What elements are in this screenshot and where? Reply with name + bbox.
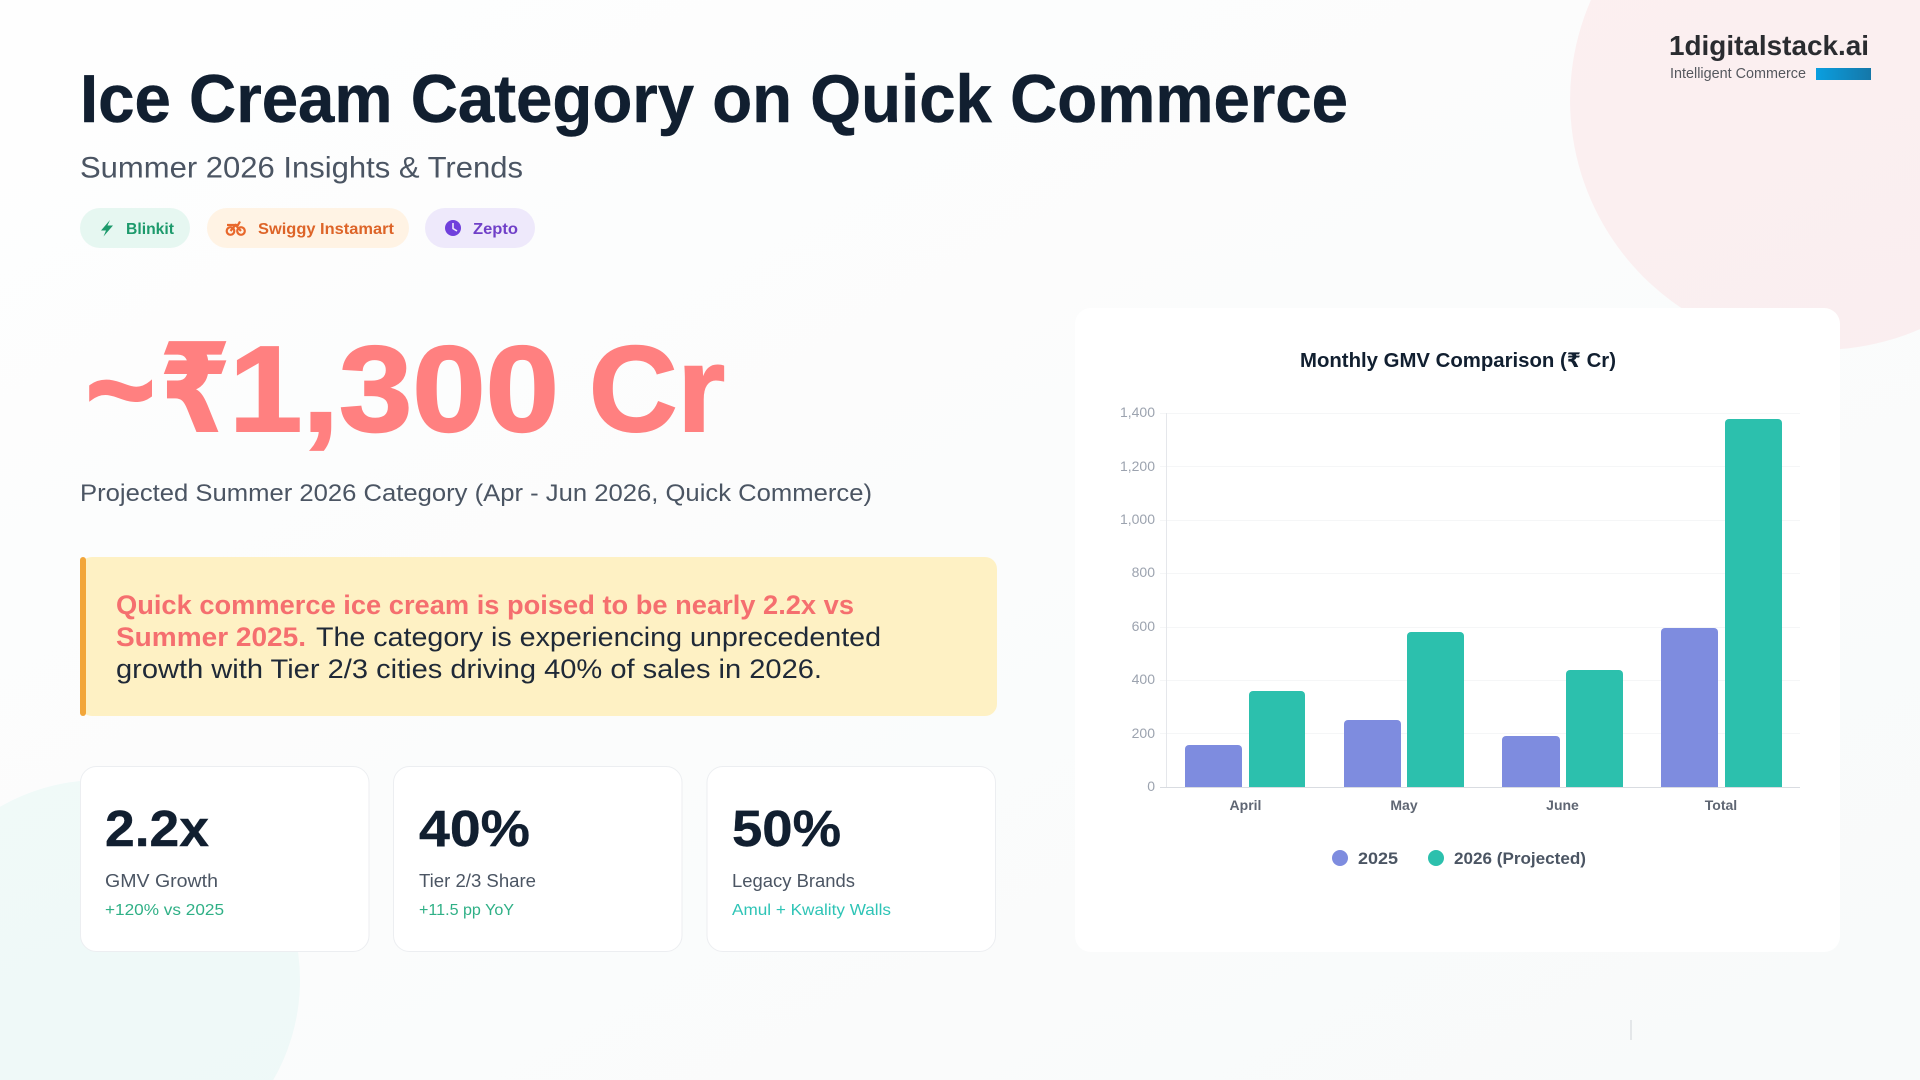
callout: The category is experiencing unprecedented (316, 622, 881, 652)
callout: growth with Tier 2/3 cities driving 40% of sales in 2026. (116, 654, 822, 684)
y axis labels (1120, 404, 1155, 794)
stat card: GMV growth (80, 766, 369, 952)
hero number: ₹ (160, 321, 230, 457)
x axis labels: April (1230, 797, 1261, 813)
x axis labels (1230, 797, 1737, 813)
bars: 2026 projected (1249, 419, 1782, 787)
callout: Summer 2025. (116, 622, 306, 652)
stat card: legacy brands: Amul + Kwality Walls (732, 902, 891, 919)
callout: Quick commerce ice cream is poised to be nearly 2.2x vs (116, 590, 854, 620)
legend: 2026 (Projected) (1454, 849, 1586, 868)
stat card: Tier 2/3 share: Tier 2/3 Share (419, 871, 536, 891)
subtitle: Summer 2026 Insights & Trends (80, 152, 523, 184)
stat card: legacy brands: Legacy Brands (732, 871, 855, 891)
callout (80, 557, 997, 716)
y axis labels: 1,200 (1120, 458, 1155, 474)
legend (1332, 849, 1586, 868)
x axis labels: June (1546, 797, 1579, 813)
stat card: Tier 2/3 share (394, 766, 682, 952)
y axis labels: 800 (1132, 564, 1155, 580)
x axis labels: May (1390, 797, 1418, 813)
legend: 2025 (1358, 849, 1398, 868)
stat card: Tier 2/3 share: 40% (419, 800, 530, 857)
stat card: GMV growth: GMV Growth (105, 871, 218, 891)
icon: clock (445, 220, 461, 236)
bars: 2025 (1185, 628, 1718, 787)
y axis labels: 1,400 (1120, 404, 1155, 420)
logo: 1digitalstack.ai: Intelligent Commerce (1670, 65, 1806, 82)
x axis labels: Total (1705, 797, 1737, 813)
hero description: Projected Summer 2026 Category (Apr - Jun 2026, Quick Commerce) (80, 480, 872, 507)
chart title: Monthly GMV Comparison (₹ Cr) (1300, 350, 1616, 372)
y axis labels: 600 (1132, 618, 1155, 634)
y axis labels: 400 (1132, 671, 1155, 687)
icon: lightning bolt (101, 220, 113, 236)
stat card: legacy brands (707, 766, 996, 952)
hero number: ~ (86, 321, 155, 457)
stat card: legacy brands: 50% (732, 800, 841, 857)
hero number (86, 321, 725, 457)
pill: Zepto (425, 208, 535, 248)
panel: monthly GMV chart (1075, 308, 1840, 952)
pill: Blinkit (80, 208, 190, 248)
y axis labels: 1,000 (1120, 511, 1155, 527)
logo: 1digitalstack.ai (1669, 30, 1871, 82)
y axis labels: 200 (1132, 725, 1155, 741)
pill: Swiggy Instamart: Swiggy Instamart (258, 221, 395, 238)
y axis labels: 0 (1147, 778, 1155, 794)
stat card: GMV growth: +120% vs 2025 (105, 902, 224, 919)
hero number: 1,300 (229, 321, 559, 457)
icon: bike (227, 222, 245, 235)
stat card: GMV growth: 2.2x (105, 800, 209, 857)
pill: Zepto: Zepto (473, 221, 518, 238)
pill: Blinkit: Blinkit (126, 221, 175, 238)
pill: Swiggy Instamart (207, 208, 409, 248)
platform pills (80, 208, 535, 248)
hero number: Cr (589, 321, 725, 457)
stat card: Tier 2/3 share: +11.5 pp YoY (419, 902, 514, 919)
logo: 1digitalstack.ai: 1digitalstack.ai (1669, 30, 1869, 61)
title: Ice Cream Category on Quick Commerce (80, 61, 1348, 137)
